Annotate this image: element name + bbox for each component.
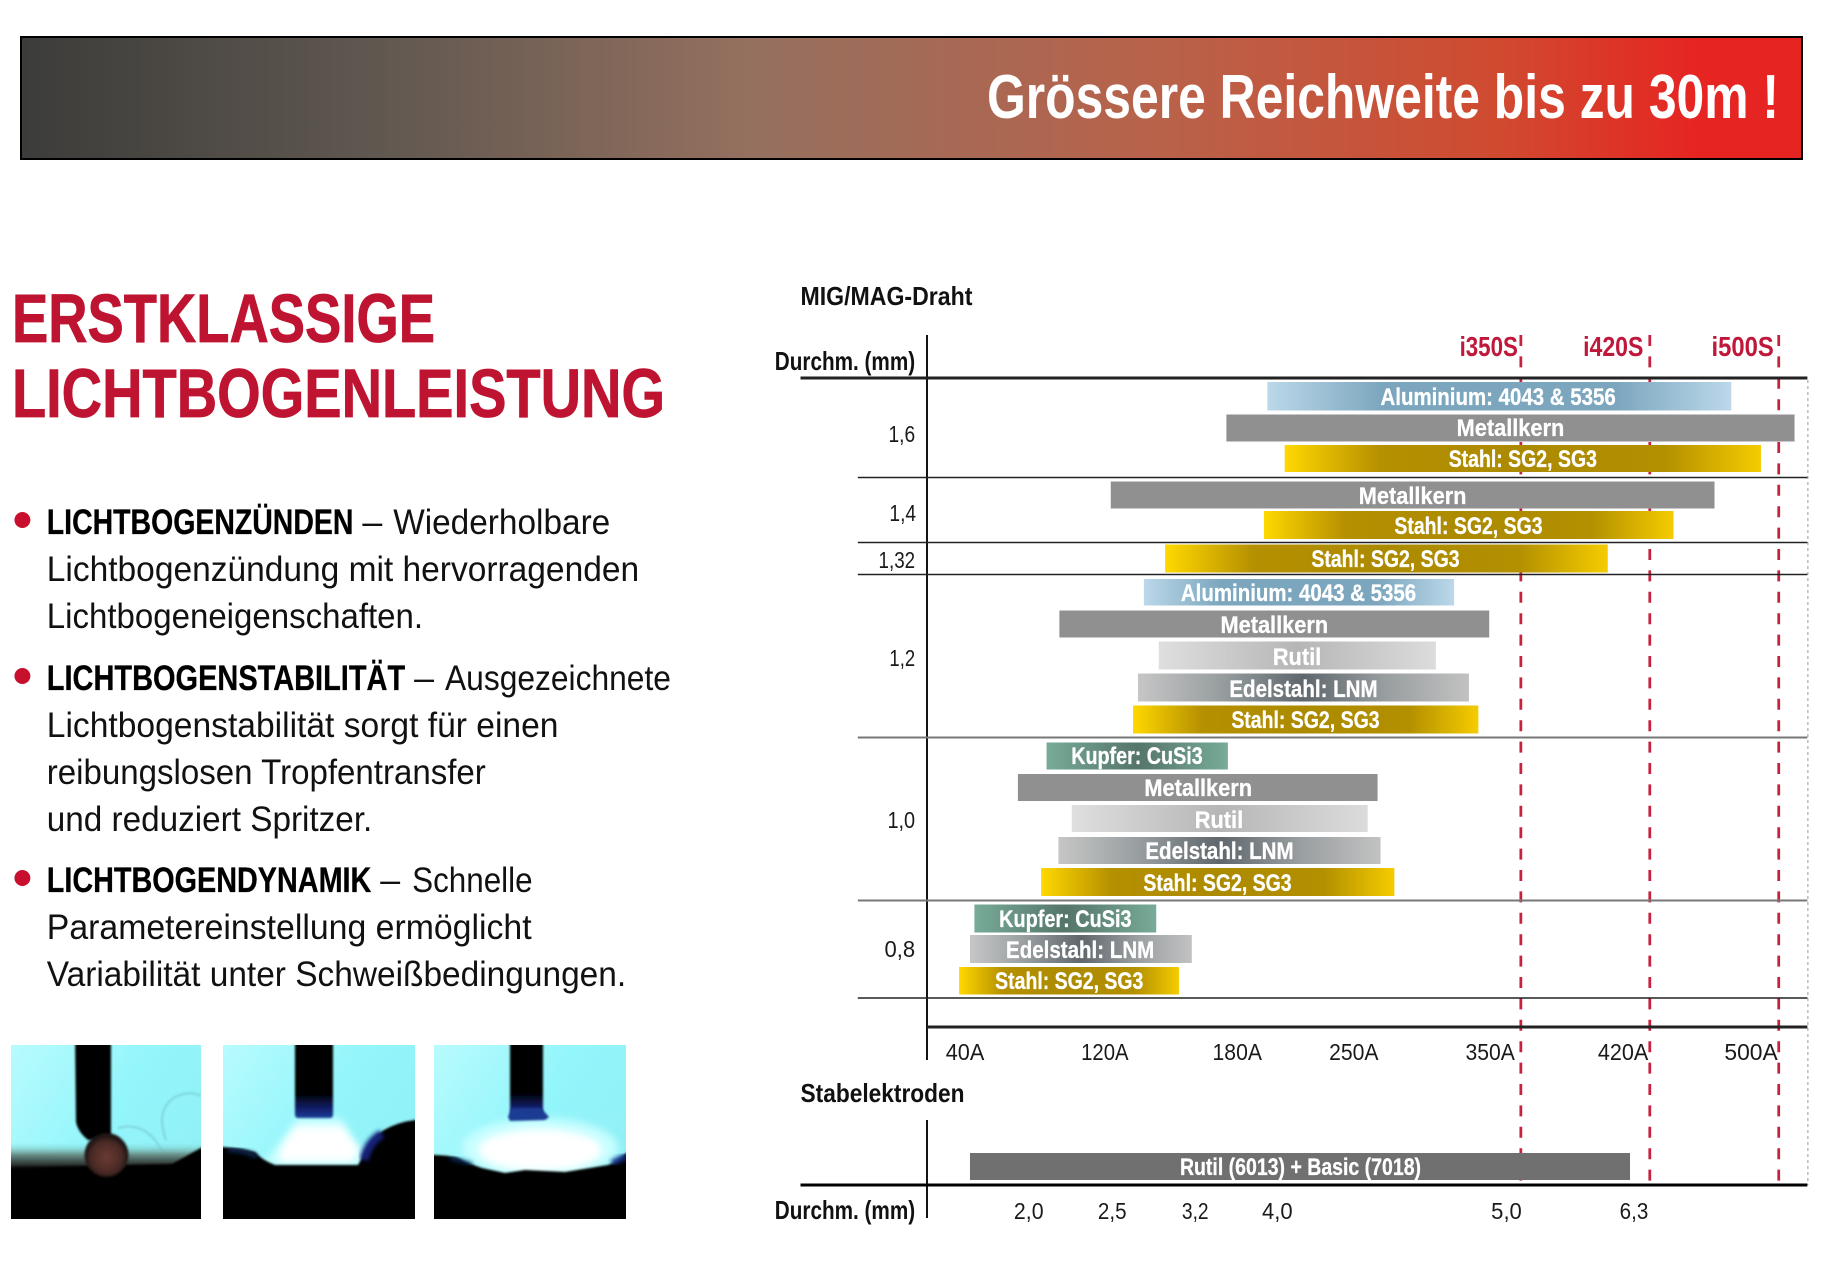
chart: MIG/MAG wire ranges xyxy=(775,283,1808,1185)
diameter labels xyxy=(879,421,916,962)
bar: Rutil + Basic: Rutil (6013) + Basic (7018) xyxy=(1180,1154,1421,1181)
heading: LICHTBOGENLEISTUNG xyxy=(12,355,665,432)
diameter labels: 1,6 xyxy=(888,421,915,447)
bar: 1,2 Stahl: Stahl: SG2, SG3 xyxy=(1231,707,1380,734)
bar: 1,2 Edelstahl: Edelstahl: LNM xyxy=(1229,676,1378,703)
bullet: Lichtbogenstabilität: Lichtbogenstabilität sorgt für einen xyxy=(47,706,558,745)
bullet: Lichtbogenzünden: Wiederholbare xyxy=(393,503,610,542)
model labels: i500S xyxy=(1712,331,1774,362)
bar: 1,2 Metallkern: Metallkern xyxy=(1220,612,1328,639)
bar: 1,6 Metallkern xyxy=(1226,414,1795,442)
bar: 1,2 Rutil: Rutil xyxy=(1273,644,1321,671)
bar: 0,8 Edelstahl: Edelstahl: LNM xyxy=(1006,937,1154,964)
bar: 1,6 Aluminium: Aluminium: 4043 & 5356 xyxy=(1381,384,1616,411)
electrode diameter labels: 2,0 xyxy=(1014,1198,1044,1224)
diameter column header: Durchm. (mm) xyxy=(775,348,915,376)
bar: 1,0 Edelstahl: Edelstahl: LNM xyxy=(1145,838,1294,865)
bar: 1,6 Metallkern: Metallkern xyxy=(1457,415,1564,442)
electrode diameter labels: 6,3 xyxy=(1620,1198,1648,1224)
electrode diameter labels: 4,0 xyxy=(1262,1198,1293,1224)
bar: 1,2 Edelstahl xyxy=(1138,674,1469,703)
amperage axis labels: 500A xyxy=(1724,1039,1778,1065)
bar: 1,4 Metallkern xyxy=(1111,482,1715,510)
bullet: Lichtbogenstabilität: – xyxy=(414,659,435,698)
photo: arc ignition xyxy=(11,1045,201,1219)
bar: 1,0 Stahl xyxy=(1041,868,1394,897)
axes and grid xyxy=(801,335,1807,1060)
bar: 1,2 Rutil xyxy=(1159,642,1436,671)
bar: 1,0 Edelstahl xyxy=(1058,837,1381,865)
model limit dashed lines xyxy=(1521,335,1779,1185)
bar: 1,6 Stahl: Stahl: SG2, SG3 xyxy=(1449,446,1597,473)
bullet: Lichtbogendynamik: Parametereinstellung ermöglicht xyxy=(47,908,532,947)
bullet: Lichtbogenzünden: Lichtbogeneigenschaften. xyxy=(47,597,423,636)
bar: 1,2 Aluminium: Aluminium: 4043 & 5356 xyxy=(1181,580,1416,607)
diameter labels: 1,32 xyxy=(879,547,915,573)
model labels: i420S xyxy=(1583,331,1643,362)
bar: 1,4 Metallkern: Metallkern xyxy=(1359,483,1466,510)
bullet: Lichtbogenstabilität: und reduziert Spritzer. xyxy=(47,800,372,839)
bullet: Lichtbogenstabilität: Ausgezeichnete xyxy=(445,659,671,698)
bullet: Lichtbogenstabilität: reibungslosen Tropfentransfer xyxy=(47,753,486,792)
bar: Rutil + Basic xyxy=(970,1153,1630,1181)
bar: 1,0 Rutil: Rutil xyxy=(1195,807,1243,834)
electrode diameter labels: 2,5 xyxy=(1098,1198,1127,1224)
bar: 0,8 Stahl: Stahl: SG2, SG3 xyxy=(995,968,1143,995)
bar: 1,32 Stahl xyxy=(1165,544,1608,573)
chart title: Stabelektroden: Stabelektroden xyxy=(801,1080,965,1108)
bullet: Lichtbogenzünden: Lichtbogenzündung mit hervorragenden xyxy=(47,550,639,589)
amperage axis labels: 350A xyxy=(1466,1039,1516,1065)
bar: 1,0 Rutil xyxy=(1072,805,1368,834)
electrode diameter labels xyxy=(1014,1198,1648,1224)
amperage axis labels: 250A xyxy=(1329,1039,1379,1065)
model labels xyxy=(1460,331,1774,362)
bullet: Lichtbogendynamik: Schnelle xyxy=(412,861,533,900)
diameter labels: 0,8 xyxy=(885,936,915,962)
model labels: i350S xyxy=(1460,331,1518,362)
amperage axis labels xyxy=(946,1039,1778,1065)
bullet: Lichtbogenzünden: LICHTBOGENZÜNDEN xyxy=(47,503,353,542)
bullet: Lichtbogenzünden xyxy=(14,503,639,636)
bullet: Lichtbogendynamik: – xyxy=(380,861,401,900)
bar: 1,6 Aluminium xyxy=(1267,382,1731,411)
electrode diameter header: Durchm. (mm) xyxy=(775,1197,915,1225)
amperage axis labels: 180A xyxy=(1213,1039,1263,1065)
amperage axis labels: 40A xyxy=(946,1039,985,1065)
diameter labels: 1,2 xyxy=(889,645,915,671)
bullet: Lichtbogendynamik xyxy=(14,861,626,994)
bar: 1,32 Stahl: Stahl: SG2, SG3 xyxy=(1311,546,1460,573)
bar: 1,6 Stahl xyxy=(1285,445,1761,473)
bar: 1,0 Kupfer: Kupfer: CuSi3 xyxy=(1071,743,1203,770)
electrode diameter labels: 5,0 xyxy=(1491,1198,1522,1224)
banner xyxy=(21,37,1802,159)
diameter labels: 1,0 xyxy=(887,807,915,833)
left text column xyxy=(12,280,671,994)
chart: stick electrodes xyxy=(775,1080,1807,1225)
amperage axis labels: 120A xyxy=(1081,1039,1129,1065)
bar: 1,2 Stahl xyxy=(1133,706,1478,734)
amperage axis labels: 420A xyxy=(1598,1039,1649,1065)
photo: arc dynamics xyxy=(434,1045,626,1219)
bullet: Lichtbogenstabilität xyxy=(14,659,671,839)
bar: 1,4 Stahl: Stahl: SG2, SG3 xyxy=(1394,513,1543,540)
bullet: Lichtbogendynamik: LICHTBOGENDYNAMIK xyxy=(47,861,371,900)
heading xyxy=(12,280,665,432)
diameter labels: 1,4 xyxy=(889,500,916,526)
bar: 1,0 Metallkern: Metallkern xyxy=(1144,775,1252,802)
chart title: MIG/MAG: MIG/MAG-Draht xyxy=(801,283,973,311)
bar: 1,0 Stahl: Stahl: SG2, SG3 xyxy=(1143,870,1292,897)
electrode diameter labels: 3,2 xyxy=(1182,1198,1209,1224)
bullet: Lichtbogendynamik: Variabilität unter Schweißbedingungen. xyxy=(47,955,626,994)
bar: 1,4 Stahl xyxy=(1264,511,1673,540)
bar: 1,0 Metallkern xyxy=(1018,774,1378,802)
heading: ERSTKLASSIGE xyxy=(12,280,435,357)
bar: 0,8 Kupfer: Kupfer: CuSi3 xyxy=(999,906,1132,933)
bullet: Lichtbogenzünden: – xyxy=(362,503,383,542)
bar: 1,2 Metallkern xyxy=(1059,610,1489,639)
photo: stable arc xyxy=(223,1045,415,1219)
bullet: Lichtbogenstabilität: LICHTBOGENSTABILITÄT xyxy=(47,659,405,698)
